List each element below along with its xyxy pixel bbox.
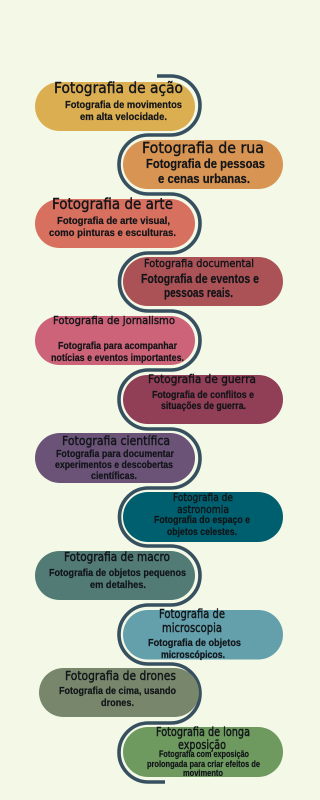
panel: Fotografia de macro: em detalhes. <box>90 579 146 591</box>
panel: Fotografia de arte: como pinturas e esculturas. <box>49 227 176 239</box>
panel: Fotografia de macro <box>35 550 195 600</box>
panel: Fotografia científica: científicas. <box>91 470 137 482</box>
panel: Fotografia científica: experimentos e descobertas <box>55 459 173 471</box>
panel: Fotografia documental: Fotografia de eventos e <box>141 272 259 286</box>
panel: Fotografia científica <box>35 433 195 483</box>
panel: Fotografia de guerra: Fotografia de guerra <box>148 372 256 386</box>
panel: Fotografia de jornalismo: notícias e eventos importantes. <box>51 352 184 364</box>
panel: Fotografia de guerra: Fotografia de conflitos e <box>152 389 254 401</box>
panel: Fotografia de arte: Fotografia de arte visual, <box>57 215 170 227</box>
panel: Fotografia de jornalismo: Fotografia de jornalismo <box>53 314 175 327</box>
panel: Fotografia de longa exposição: movimento <box>183 768 223 778</box>
panel: Fotografia de longa exposição: Fotografia com exposição <box>159 749 249 759</box>
panel: Fotografia de longa exposição: exposição <box>178 738 226 752</box>
panel: Fotografia científica: Fotografia científica <box>62 434 170 448</box>
panel: Fotografia de guerra: situações de guerra. <box>161 400 246 412</box>
panel: Fotografia de rua: Fotografia de pessoas <box>146 157 265 171</box>
panel: Fotografia científica: Fotografia para documentar <box>56 448 174 460</box>
panel: Fotografia de astronomia <box>123 491 283 542</box>
panel: Fotografia de longa exposição <box>123 725 283 778</box>
panel: Fotografia de rua <box>123 139 283 189</box>
panel: Fotografia de longa exposição: Fotografia de longa <box>156 725 250 739</box>
panel: Fotografia documental <box>123 257 283 306</box>
panel: Fotografia de ação: em alta velocidade. <box>80 111 167 123</box>
panel: Fotografia de drones: Fotografia de drones <box>65 668 176 683</box>
panel: Fotografia de microscopia: Fotografia de objetos <box>148 637 241 649</box>
panel: Fotografia de jornalismo <box>35 314 195 365</box>
panel: Fotografia de drones: drones. <box>101 697 134 709</box>
panel: Fotografia documental: Fotografia documental <box>144 257 254 270</box>
panel: Fotografia de astronomia: Fotografia do espaço e <box>154 514 250 526</box>
panel: Fotografia de guerra <box>123 372 283 424</box>
panel: Fotografia de astronomia: objetos celestes. <box>167 526 237 538</box>
panel: Fotografia de astronomia: Fotografia de <box>173 491 233 504</box>
panel: Fotografia de jornalismo: Fotografia para acompanhar <box>58 340 177 352</box>
panel: Fotografia de ação: Fotografia de ação <box>54 79 183 97</box>
panel: Fotografia de arte <box>35 195 195 248</box>
panel: Fotografia de microscopia: microscopia <box>162 621 222 635</box>
panel: Fotografia de microscopia <box>123 607 283 661</box>
panel: Fotografia de macro: Fotografia de macro <box>64 550 170 564</box>
panel: Fotografia de macro: Fotografia de objetos pequenos <box>49 567 186 579</box>
panel: Fotografia de arte: Fotografia de arte <box>52 195 173 213</box>
panel: Fotografia de drones: Fotografia de cima, usando <box>59 685 176 697</box>
panel: Fotografia de microscopia: Fotografia de <box>159 607 225 621</box>
serpentine connector line <box>119 76 200 782</box>
panel: Fotografia de rua: Fotografia de rua <box>142 139 264 157</box>
panel: Fotografia de ação <box>35 79 195 131</box>
panel: Fotografia de longa exposição: prolongada para criar efeitos de <box>147 759 260 769</box>
panel: Fotografia de rua: e cenas urbanas. <box>158 172 250 186</box>
panel: Fotografia de microscopia: microscópicos. <box>161 649 225 661</box>
panel: Fotografia de drones <box>39 668 199 717</box>
panel: Fotografia de astronomia: astronomia <box>177 503 229 516</box>
panel: Fotografia documental: pessoas reais. <box>164 286 233 300</box>
panel: Fotografia de ação: Fotografia de movimentos <box>65 99 182 111</box>
